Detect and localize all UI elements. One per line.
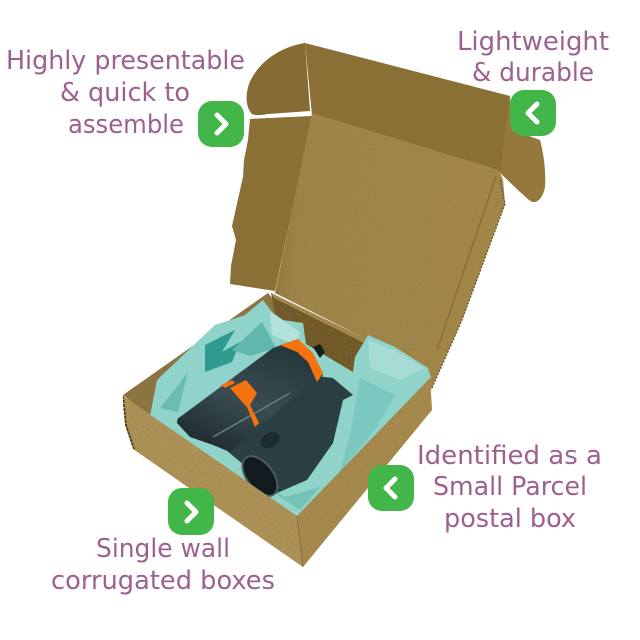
- corrugated left edge: [123, 396, 134, 449]
- callout text: & quick to: [60, 78, 190, 108]
- inner left wall: [123, 293, 290, 422]
- bottle highlight: [213, 393, 290, 437]
- callout text: assemble: [68, 110, 184, 140]
- callout text: Identified as a: [417, 441, 602, 471]
- icon: green right chevron: [198, 101, 244, 147]
- box interior: [123, 293, 368, 422]
- orange cap ring: [280, 339, 323, 382]
- main lid panel: [275, 113, 505, 392]
- orange band tip: [221, 380, 235, 388]
- icon: green right chevron: [168, 488, 214, 535]
- box lid: [230, 43, 545, 392]
- callout text: Highly presentable: [6, 46, 245, 76]
- water bottle with orange bands: [177, 339, 325, 452]
- right lid ear: [497, 97, 545, 202]
- lid fold line: [437, 176, 496, 350]
- second water bottle: [226, 376, 353, 502]
- callout: lightweight and durable: [457, 27, 617, 136]
- callout text: Small Parcel: [433, 472, 587, 502]
- callout text: & durable: [472, 58, 594, 88]
- corner fold: [297, 516, 303, 567]
- bottle cap nub: [313, 344, 325, 358]
- icon: green left chevron: [510, 90, 556, 136]
- front left wall: [123, 396, 303, 567]
- tissue paper: [150, 300, 431, 517]
- callout text: postal box: [444, 504, 576, 534]
- left lid ear: [247, 43, 310, 115]
- bottle grip recess: [258, 429, 282, 451]
- callout text: corrugated boxes: [51, 566, 275, 596]
- callout: small parcel postal box: [368, 441, 610, 534]
- back wall lit rim: [271, 293, 368, 344]
- orange middle band: [230, 380, 259, 427]
- callout: single wall corrugated: [51, 488, 275, 596]
- back lid strip: [305, 43, 510, 172]
- inner back wall: [271, 293, 368, 385]
- bottle base rim: [236, 450, 284, 502]
- box outer walls: [123, 378, 432, 567]
- open cardboard box: [123, 43, 545, 567]
- lid corrugated edge: [432, 180, 505, 388]
- icon: green left chevron: [368, 465, 414, 511]
- callout text: Lightweight: [457, 27, 609, 57]
- callout: highly presentable: [6, 46, 253, 147]
- callout text: Single wall: [96, 534, 230, 564]
- front right wall: [297, 378, 432, 567]
- left lid flap: [230, 116, 312, 291]
